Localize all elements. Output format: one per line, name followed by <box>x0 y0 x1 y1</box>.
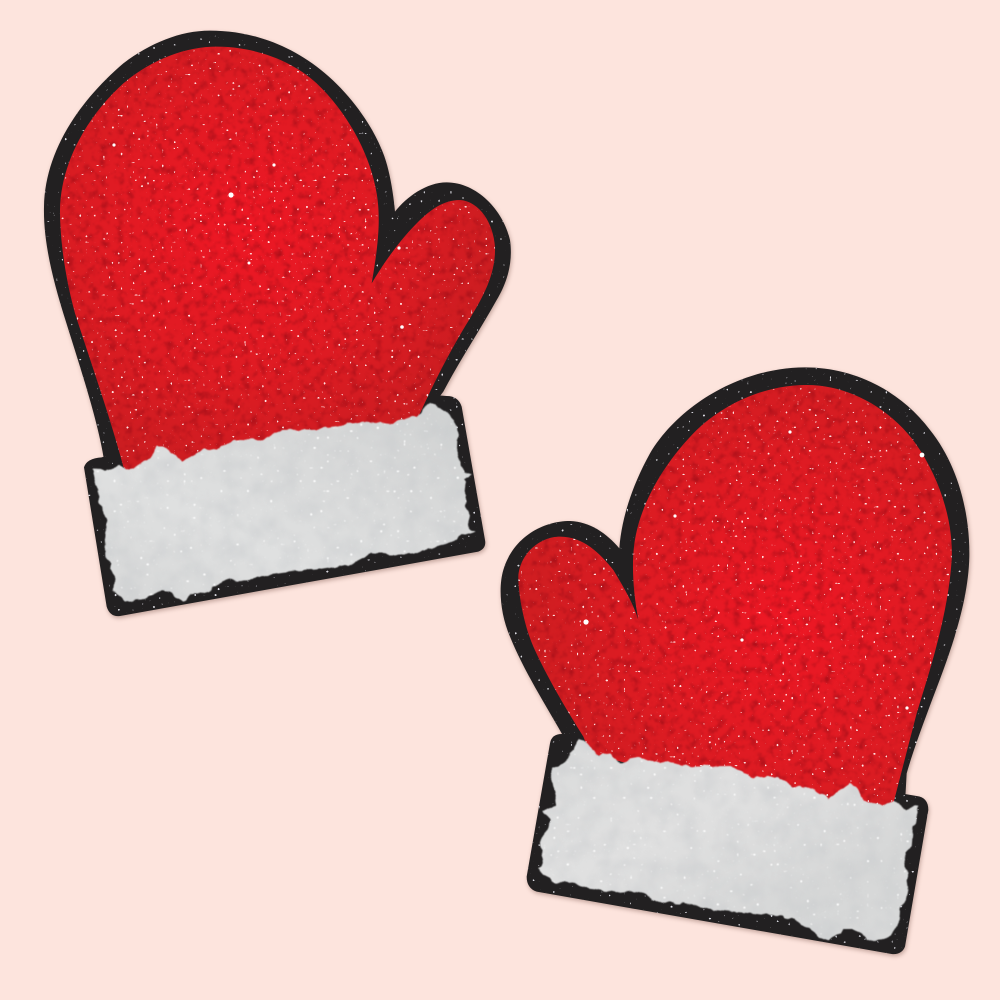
right mitten sparkles <box>583 430 924 710</box>
left mitten white fur cuff <box>92 402 475 602</box>
left mitten sparkles <box>112 143 404 329</box>
left mitten black outline <box>44 31 511 616</box>
right mitten red body <box>518 385 952 827</box>
right mitten white fur cuff <box>537 739 919 940</box>
left mitten red body <box>60 47 495 477</box>
right mitten black outline <box>501 367 969 954</box>
left mitten <box>44 31 511 616</box>
right mitten <box>501 367 969 954</box>
